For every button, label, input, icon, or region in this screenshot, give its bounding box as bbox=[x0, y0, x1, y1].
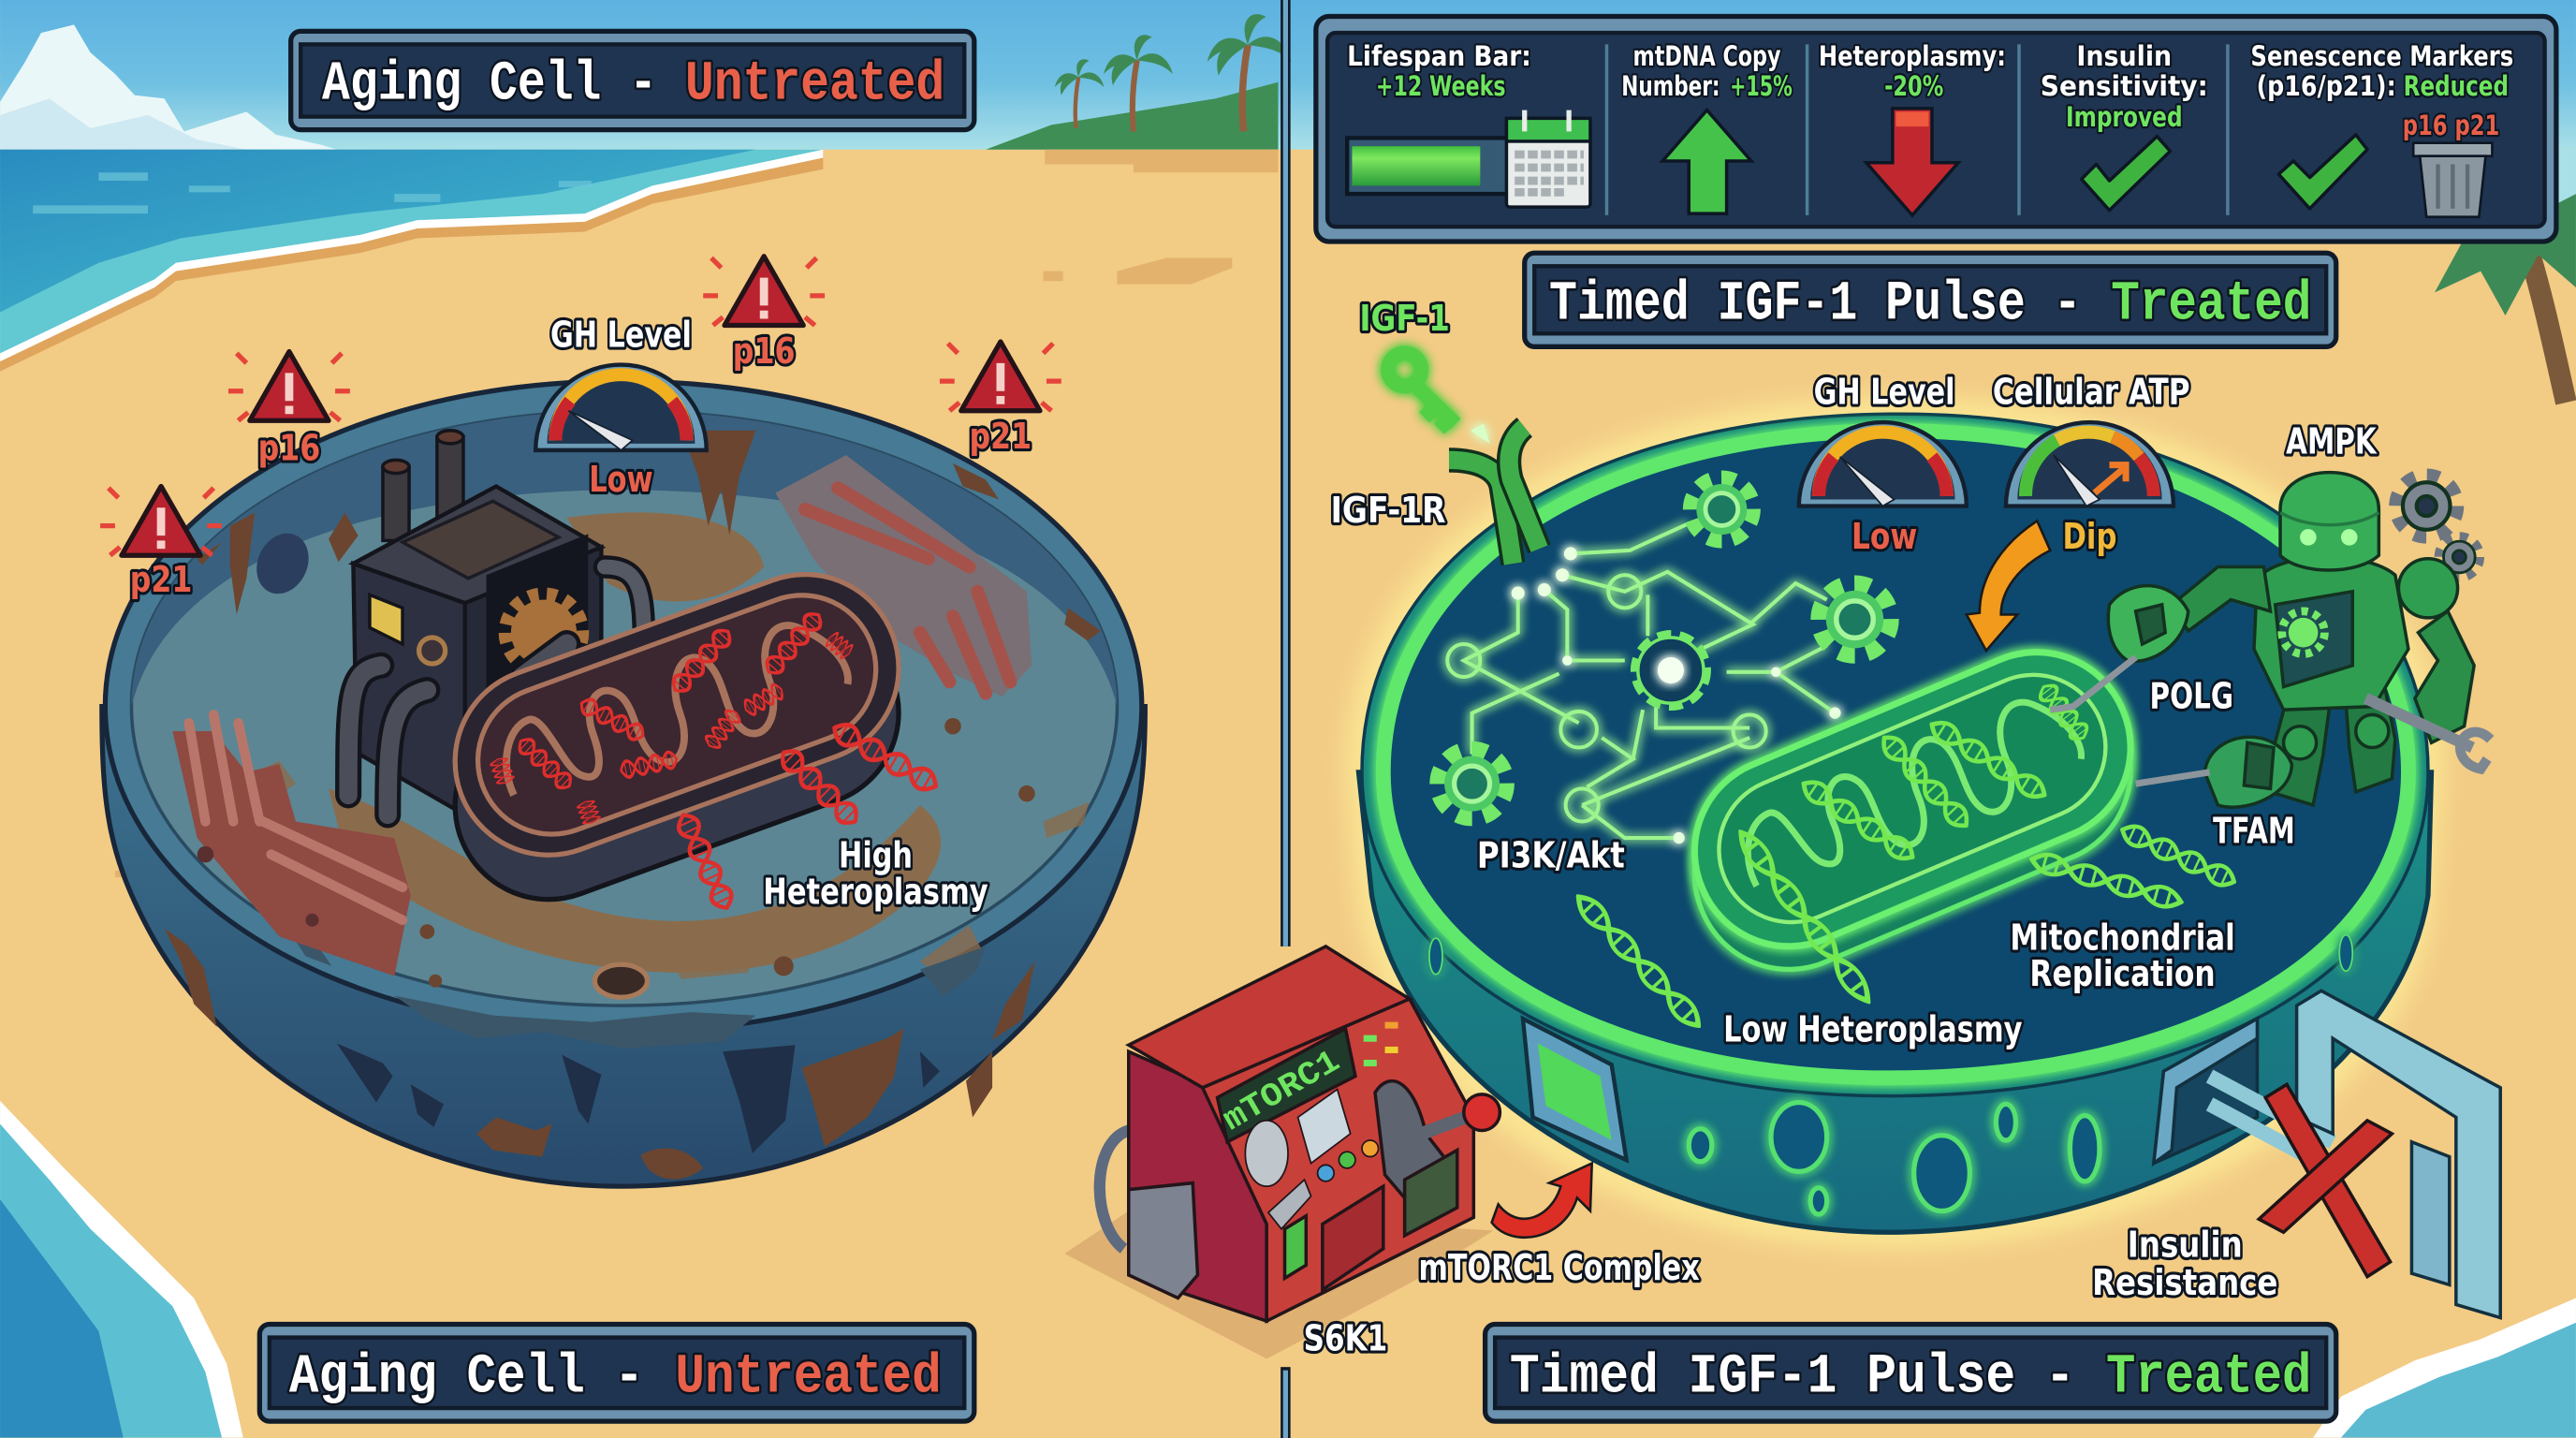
labels: treated cell: IGF-1R bbox=[1331, 490, 1445, 532]
title: aging cell top bbox=[291, 31, 974, 130]
closed slot in cell wall bbox=[2154, 1019, 2257, 1164]
title: aging cell bottom: Untreated bbox=[675, 1345, 942, 1409]
metric: mtDNA copy number bbox=[1621, 40, 1793, 213]
pipes bbox=[348, 566, 644, 814]
metric: mtDNA copy number: Number: bbox=[1621, 70, 1720, 102]
metric: mtDNA copy number: +15% bbox=[1730, 70, 1793, 102]
torso bbox=[2254, 557, 2408, 710]
background: sky bbox=[0, 0, 2576, 218]
organelle: endoplasmic reticulum left bbox=[172, 714, 411, 976]
metric: senescence markers: (p16/p21): bbox=[2257, 70, 2396, 102]
title: treated bottom: Treated bbox=[2106, 1345, 2311, 1409]
machine body bbox=[353, 564, 465, 814]
left side bbox=[1129, 1051, 1266, 1321]
lever slot and handle bbox=[1375, 1081, 1454, 1208]
warning: p16 top bbox=[703, 257, 825, 325]
warning: p21 right bbox=[940, 342, 1061, 411]
labels: treated cell: mTORC1 Complex bbox=[1419, 1247, 1700, 1289]
background: palm and beach, right scene bbox=[2435, 194, 2576, 403]
metric: mtDNA copy number: mtDNA Copy bbox=[1633, 40, 1781, 72]
labels: treated cell: Insulin bbox=[2128, 1225, 2243, 1267]
metric: heteroplasmy bbox=[1819, 40, 2006, 215]
claw bbox=[2108, 586, 2188, 661]
gauge: GH level untreated bbox=[535, 365, 707, 450]
cable bbox=[1100, 1130, 1129, 1249]
arrow: mTORC1 activation bbox=[1492, 1164, 1592, 1238]
labels: treated cell: Low bbox=[1852, 516, 1917, 558]
metric: senescence markers bbox=[2250, 40, 2513, 217]
labels: untreated cell: Heteroplasmy bbox=[763, 871, 988, 913]
labels: treated cell: Cellular ATP bbox=[1993, 372, 2190, 414]
labels: treated cell: POLG bbox=[2150, 675, 2233, 717]
background: distant hill and palms, left scene bbox=[986, 14, 1291, 150]
labels: untreated cell: p16 bbox=[733, 330, 795, 373]
background: sand patches bbox=[98, 150, 1278, 1312]
labels: untreated cell: p21 bbox=[970, 416, 1032, 458]
wrench bbox=[2365, 698, 2472, 748]
gears behind robot bbox=[2397, 477, 2456, 536]
warning: p16 left bbox=[228, 352, 350, 420]
title: treated top: Treated bbox=[2111, 271, 2311, 335]
mTORC1 machine bbox=[1100, 946, 1500, 1321]
background: bottom-right ocean bbox=[2313, 1298, 2576, 1438]
title: aging cell bottom: Aging Cell - bbox=[289, 1345, 644, 1409]
labels: untreated cell: p16 bbox=[258, 427, 320, 469]
background: bottom-left ocean bbox=[0, 1101, 243, 1438]
labels: treated cell: PI3K/Akt bbox=[1477, 835, 1625, 877]
labels: treated cell: Dip bbox=[2062, 516, 2116, 558]
panel: results dashboard bbox=[1316, 17, 2556, 242]
damaged generator machine bbox=[348, 431, 644, 814]
icon: AMPK robot bbox=[2050, 473, 2491, 807]
labels: untreated cell: p21 bbox=[130, 559, 192, 601]
arrow: ATP dip to mitochondrion bbox=[1967, 521, 2050, 651]
machine shadow bbox=[1064, 1208, 1493, 1358]
metric: insulin sensitivity: Insulin bbox=[2076, 40, 2172, 72]
labels: treated cell: Mitochondrial bbox=[2010, 917, 2235, 959]
insulin receptor door bbox=[2154, 990, 2500, 1318]
title: aging cell top: Aging Cell - bbox=[322, 51, 657, 115]
metric: lifespan bbox=[1347, 40, 1590, 207]
power unit bbox=[1129, 1183, 1197, 1298]
icon: IGF-1R receptor bbox=[1449, 427, 1540, 564]
panel: treated cell bbox=[1358, 414, 2431, 1232]
metric: lifespan: +12 Weeks bbox=[1376, 70, 1506, 102]
title: treated bottom bbox=[1486, 1325, 2336, 1421]
glowing membrane bbox=[1383, 431, 2408, 1078]
healthy mitochondrion bbox=[1572, 624, 2238, 1032]
gear: mid right bbox=[1820, 584, 1890, 654]
small gear bbox=[2439, 537, 2479, 577]
gauge: GH level treated bbox=[1799, 422, 1967, 506]
metric: heteroplasmy: -20% bbox=[1884, 70, 1943, 102]
background: clouds bbox=[0, 24, 337, 150]
labels: untreated cell: High bbox=[839, 835, 913, 877]
cell wall bbox=[102, 707, 1145, 1186]
legs bbox=[2271, 698, 2330, 805]
gauge: cellular ATP bbox=[2006, 422, 2174, 506]
rusty gear bbox=[487, 534, 588, 731]
upper inner wall bbox=[131, 411, 1117, 707]
labels: untreated cell bbox=[130, 314, 1032, 913]
panel: aging cell bbox=[100, 257, 1145, 1186]
background: left ocean and shoreline bbox=[0, 150, 823, 372]
metric: senescence markers: p16 p21 bbox=[2403, 110, 2499, 141]
labels: treated cell: Low Heteroplasmy bbox=[1723, 1009, 2022, 1051]
title: aging cell bottom bbox=[259, 1325, 974, 1421]
damaged mitochondrion bbox=[429, 548, 941, 926]
cell wall bbox=[1358, 772, 2431, 1232]
red mutated DNA bbox=[490, 609, 941, 912]
buttons bbox=[1245, 1090, 1379, 1229]
gear: bottom left bbox=[1439, 750, 1505, 817]
gear: central hub bbox=[1636, 636, 1705, 705]
bars bbox=[2210, 1077, 2333, 1170]
labels: treated cell: IGF-1 bbox=[1359, 298, 1450, 340]
display with label: mTORC1 bbox=[1217, 1043, 1347, 1139]
metric: insulin sensitivity: Sensitivity: bbox=[2041, 70, 2208, 102]
center divider bbox=[1281, 0, 1291, 1438]
right shoulder and arm bbox=[2398, 559, 2458, 618]
metric: lifespan: Lifespan Bar: bbox=[1347, 40, 1531, 72]
cell rim bbox=[1362, 414, 2428, 1096]
signaling circuit bbox=[1447, 524, 1841, 844]
door leaf bbox=[2411, 1142, 2450, 1284]
gears bbox=[1691, 478, 1752, 540]
labels: treated cell: TFAM bbox=[2213, 810, 2295, 852]
door frame bbox=[2297, 990, 2500, 1318]
metric: senescence markers: Reduced bbox=[2404, 70, 2509, 102]
red X bbox=[2259, 1084, 2392, 1277]
broken rim rust bbox=[283, 920, 986, 1049]
green healthy DNA bbox=[1572, 681, 2238, 1032]
meter bbox=[370, 594, 402, 644]
metric: insulin sensitivity bbox=[2041, 40, 2208, 211]
organelle: golgi stack right bbox=[775, 455, 1032, 697]
cell rim bbox=[105, 381, 1142, 1032]
floor stains bbox=[239, 512, 1090, 979]
cell halo bbox=[1362, 414, 2428, 1232]
labels: treated cell: Resistance bbox=[2092, 1262, 2277, 1304]
cell floor bbox=[131, 411, 1117, 1005]
top bbox=[1129, 946, 1410, 1088]
metric: heteroplasmy: Heteroplasmy: bbox=[1819, 40, 2006, 72]
front bbox=[1203, 999, 1473, 1321]
left arm bbox=[2172, 566, 2271, 631]
lower panels bbox=[1284, 1216, 1306, 1278]
labels: treated cell: S6K1 bbox=[1304, 1318, 1387, 1360]
rust on cell wall bbox=[165, 929, 1035, 1180]
chimneys bbox=[383, 431, 463, 540]
title: treated bottom: Timed IGF-1 Pulse - bbox=[1510, 1345, 2075, 1409]
head bbox=[2280, 473, 2378, 570]
metric: senescence markers: Senescence Markers bbox=[2250, 40, 2513, 72]
title: treated top bbox=[1525, 253, 2336, 346]
labels: treated cell: Replication bbox=[2029, 953, 2216, 995]
icon: IGF-1 key bbox=[1388, 353, 1490, 444]
labels: treated cell: AMPK bbox=[2286, 420, 2378, 462]
labels: untreated cell: Low bbox=[589, 459, 653, 501]
labels: treated cell: GH Level bbox=[1814, 372, 1955, 414]
POLG probe bbox=[2050, 657, 2136, 710]
TFAM clamp bbox=[2204, 737, 2291, 807]
labels: untreated cell: GH Level bbox=[550, 314, 692, 356]
dials bbox=[419, 638, 446, 664]
title: aging cell top: Untreated bbox=[685, 51, 944, 115]
wall port with green screen bbox=[1523, 1019, 1627, 1160]
labels: treated cell bbox=[1304, 298, 2378, 1360]
warning: p21 far left bbox=[100, 486, 222, 555]
wall pores bbox=[1429, 935, 2352, 1214]
title: treated top: Timed IGF-1 Pulse - bbox=[1549, 271, 2082, 335]
metric: insulin sensitivity: Improved bbox=[2066, 101, 2183, 133]
rust streaks on rim bbox=[198, 431, 1101, 997]
